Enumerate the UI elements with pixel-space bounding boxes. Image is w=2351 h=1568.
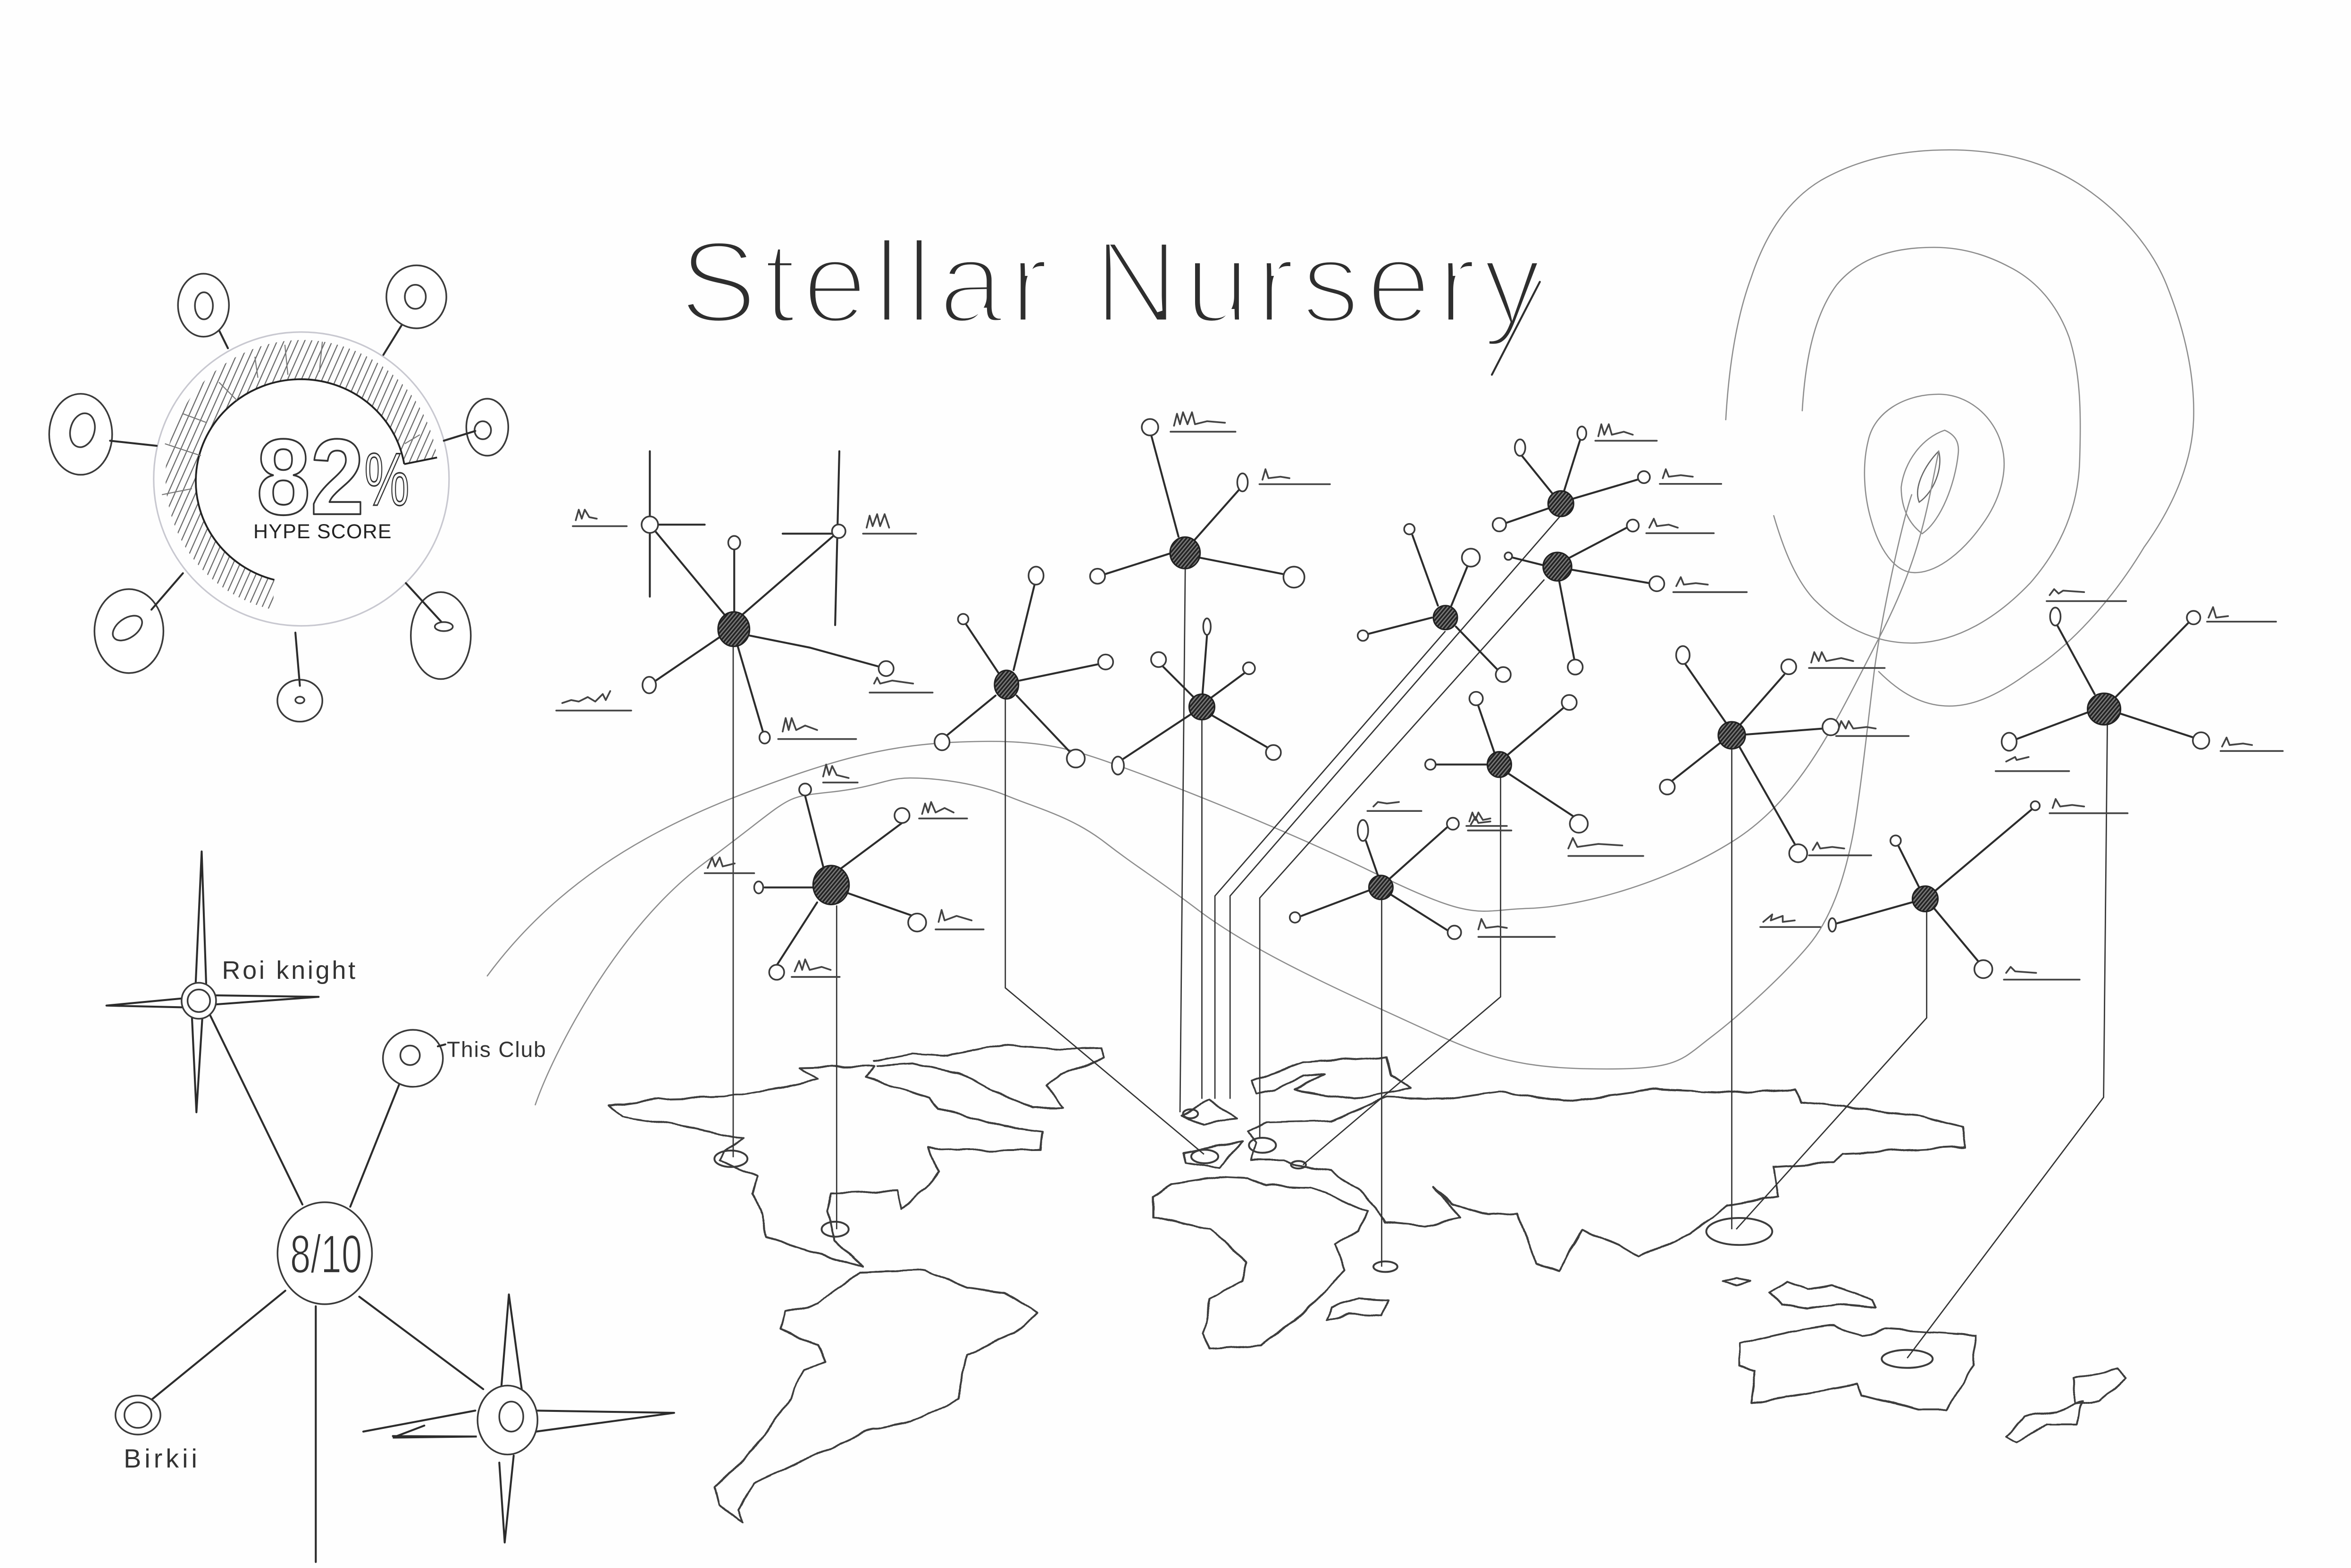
continent: South America — [715, 1270, 1037, 1523]
hype score label: HYPE SCORE — [253, 520, 391, 543]
cluster F — [1358, 524, 1511, 682]
satellite: bottom — [277, 633, 322, 722]
gauge hatched arc — [166, 340, 437, 609]
label: Roi Knight: Roi knight — [222, 956, 355, 984]
connector lines to map — [733, 516, 2108, 1358]
cluster A — [556, 451, 933, 743]
spokes — [150, 1013, 483, 1562]
gauge inner arc edge — [196, 379, 437, 580]
spiral nebula contours — [1726, 150, 2194, 706]
continent: Eurasia — [1247, 1089, 1965, 1270]
orbit curves — [487, 451, 1939, 1105]
percent sign: % — [364, 437, 410, 521]
node: Birkii — [116, 1396, 160, 1435]
continent: Australia — [1739, 1325, 1975, 1410]
cluster E — [1112, 618, 1281, 775]
rating network — [107, 851, 674, 1562]
island: Madagascar — [1326, 1298, 1389, 1320]
cluster I — [1425, 692, 1643, 856]
continent: North America — [608, 1066, 1042, 1267]
cluster C — [935, 567, 1113, 767]
peninsula: Iberia — [1184, 1142, 1242, 1168]
island: Britain — [1181, 1101, 1238, 1125]
satellite: left — [49, 394, 157, 475]
gauge dividers — [162, 342, 420, 495]
map location markers — [714, 1109, 1933, 1368]
satellite: lower left — [94, 573, 183, 673]
continent: Greenland — [874, 1045, 1105, 1108]
satellite: top left — [178, 274, 229, 348]
cluster K — [1660, 646, 1909, 862]
satellite: lower right — [406, 583, 471, 679]
rating hub — [277, 1202, 372, 1304]
cluster J — [1290, 802, 1555, 939]
title: Stellar Nursery — [679, 217, 1541, 347]
cluster L — [1760, 799, 2127, 980]
label: This Club: This Club — [447, 1037, 546, 1061]
continent: Africa — [1153, 1177, 1368, 1349]
continent: Scandinavia — [1252, 1057, 1410, 1099]
hype score gauge — [49, 265, 508, 722]
hype score value: 82 — [256, 417, 364, 537]
cluster M — [1996, 589, 2283, 771]
star node: Roi Knight — [107, 851, 318, 1112]
islands: Indonesia — [1723, 1277, 1876, 1309]
world map — [608, 1045, 2126, 1523]
star node: unnamed — [363, 1294, 674, 1543]
label: Birkii: Birkii — [124, 1444, 197, 1473]
node: This Club — [383, 1030, 445, 1087]
cluster D — [1090, 412, 1330, 588]
cluster H — [1505, 519, 1747, 675]
rating value: 8/10 — [290, 1224, 362, 1284]
cluster G — [1493, 424, 1721, 532]
islands: New Zealand — [2006, 1368, 2126, 1442]
gauge outer ring — [154, 332, 449, 626]
satellite: right — [444, 399, 508, 456]
cluster B — [705, 765, 984, 980]
satellite: top right — [384, 265, 446, 355]
